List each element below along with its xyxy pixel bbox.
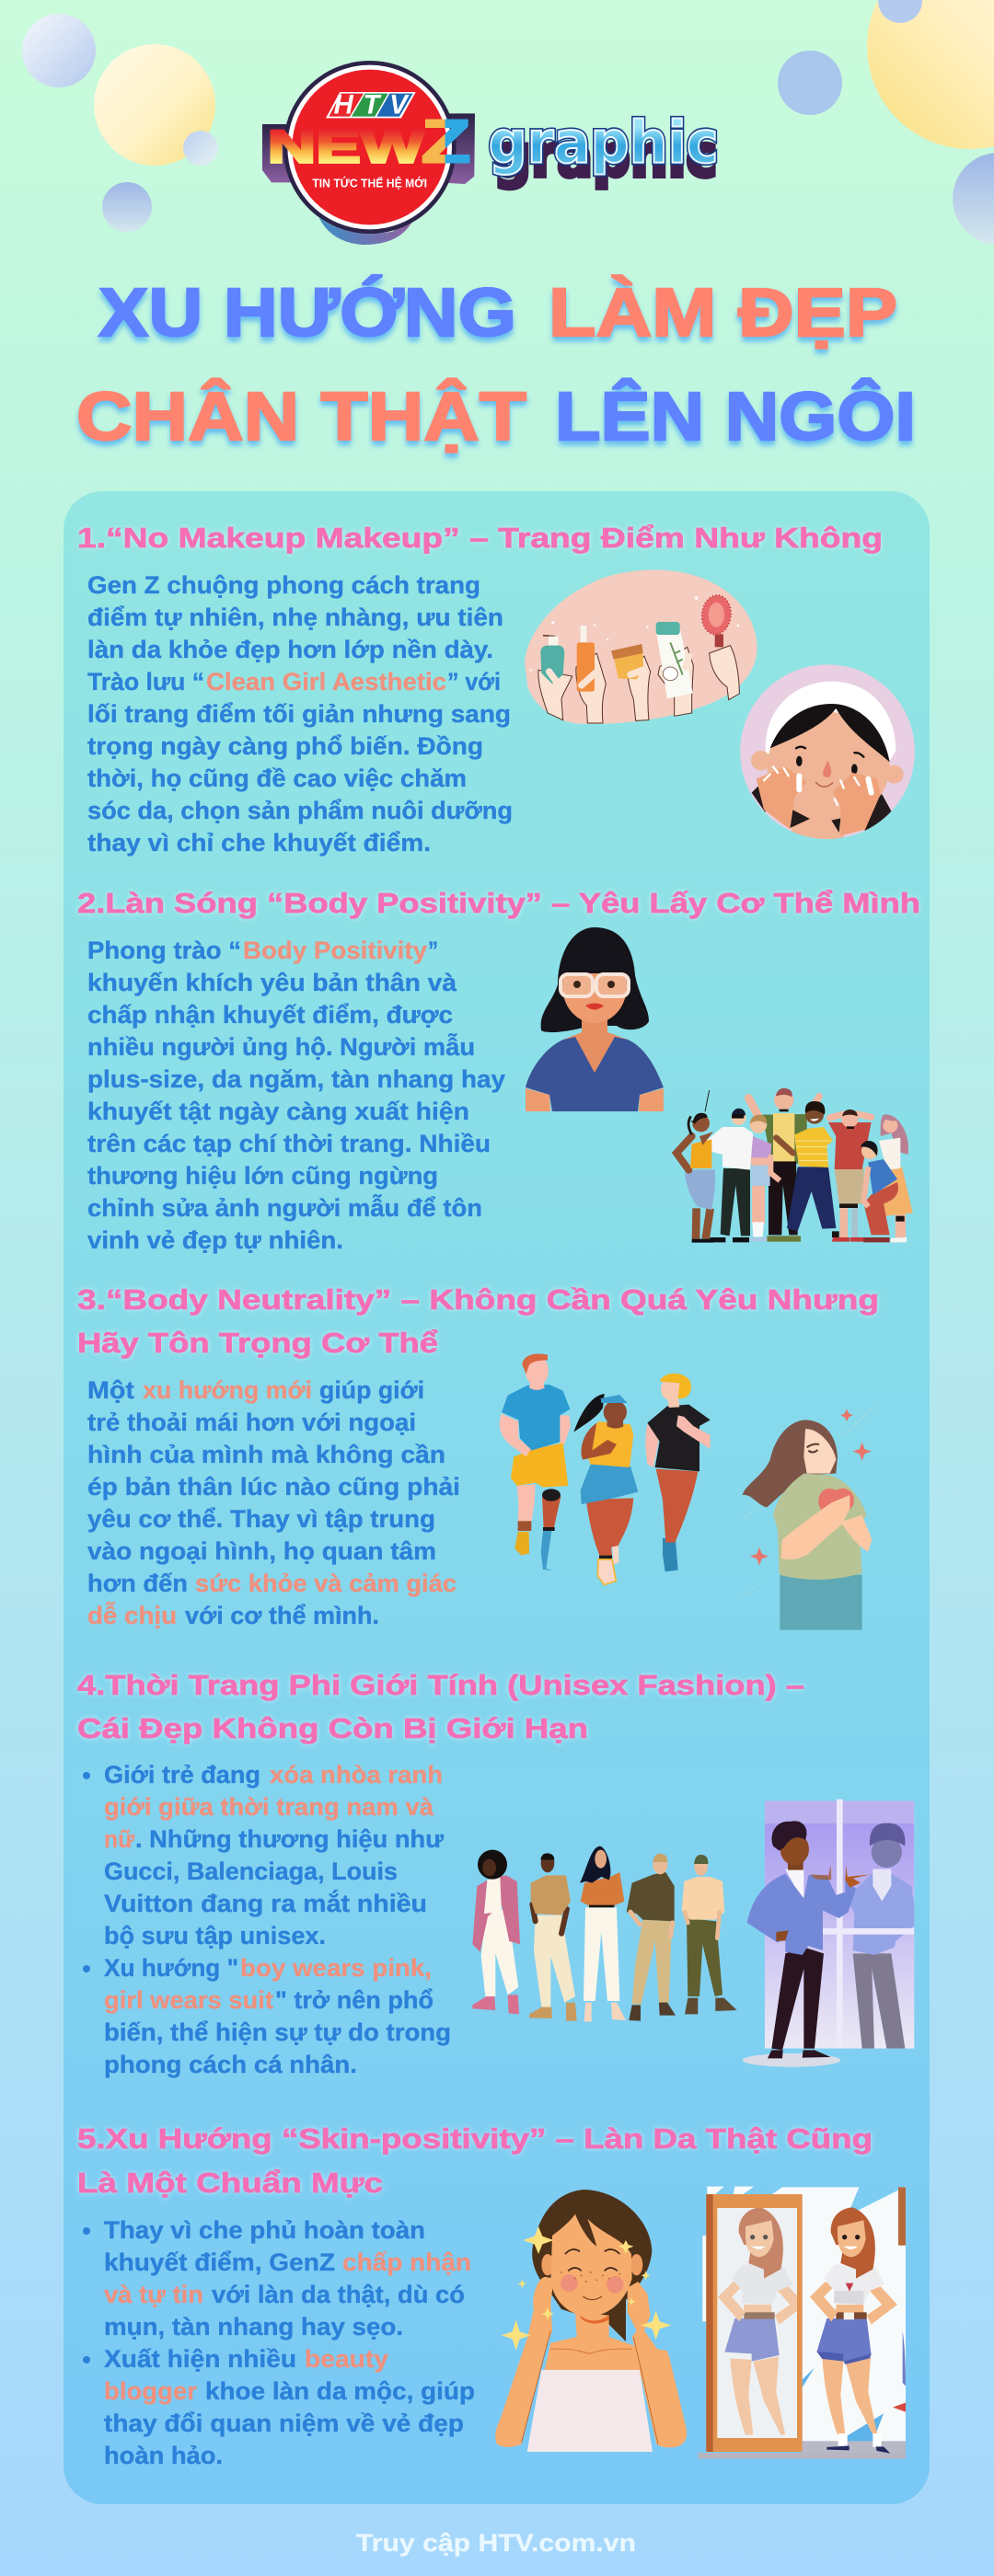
icon: HTV badge: HTV [334,89,410,120]
person: long black hair woman [580,1846,626,2021]
section 2 text: khuyến khích yêu bản thân và [87,969,457,996]
section 4 bullets: . Những thương hiệu như [135,1825,444,1853]
section 5 bullets: và tự tin [104,2281,203,2308]
runner: woman in yellow top [573,1394,638,1585]
reflection [847,1823,918,2049]
section 5 bullets: Xuất hiện nhiều [104,2345,296,2373]
section 1 text [87,571,513,857]
section 5 bullets: Thay vì che phủ hoàn toàn [104,2216,425,2244]
icon: sparkles [750,1409,872,1566]
person: tan sweater [529,1853,577,2021]
person: braided hair woman [676,1090,715,1243]
graphic wordmark: graphic [489,109,719,177]
person: cropped top woman [750,1115,780,1242]
mirror reflection [718,2207,805,2435]
section 2 text: Body Positivity [243,937,427,964]
section 2 text: chấp nhận khuyết điểm, được [87,1001,453,1029]
section 5 heading: Là Một Chuẩn Mực [77,2167,383,2199]
person: white hoodie [702,1109,753,1242]
section 1 text: Clean Girl Aesthetic [206,668,446,696]
panel: content [64,491,930,2504]
section 1 text: ” với [447,668,501,696]
section 3 text: xu hướng mới [143,1376,312,1404]
section 1 text: Gen Z chuộng phong cách trang [87,571,480,599]
section 2 text: plus-size, da ngăm, tàn nhang hay [87,1065,505,1093]
section 4 bullets: girl wears suit [104,1986,273,2014]
section 4 bullets [83,1761,451,2078]
section 4 heading [77,1669,804,1744]
section 3 text: hơn đến [87,1570,188,1597]
logo: HTV NEWZ graphic: NEW [268,121,425,173]
fingers over products [549,656,729,685]
section 2 text: trên các tạp chí thời trang. Nhiều [87,1130,491,1157]
section 5 bullets: khuyết điểm, GenZ [104,2248,335,2276]
section 3 heading [77,1283,879,1359]
section 3 text: hình của mình mà không cần [87,1441,445,1468]
section 5 bullets: khoe làn da mộc, giúp [205,2377,475,2405]
section 3 text: giúp giới [319,1376,424,1404]
section 1 text: thay vì chỉ che khuyết điểm. [87,829,431,857]
section 2 text: vinh vẻ đẹp tự nhiên. [87,1226,343,1254]
person: red shirt arms up [828,1110,872,1242]
logo: HTV NEWZ graphic: Z [421,109,471,177]
mirror [706,2194,805,2452]
section 2 text: ” [428,937,438,964]
section 2 text [87,937,505,1254]
section 4 bullets: nữ [104,1825,134,1853]
illustration: hands holding skincare products [525,569,757,724]
person: pink blazer [472,1850,520,2014]
illustration: smiling girl with freckles [495,2190,687,2452]
section 3 text: dễ chịu [87,1601,177,1629]
decorative bubbles [22,0,994,245]
section 5 heading: 5.Xu Hướng “Skin-positivity” – Làn Da Thật Cũng [77,2122,873,2155]
man [771,1948,824,2050]
illustration: woman and her mirror reflection [698,2187,906,2459]
section 4 bullets: Xu hướng " [104,1954,238,1982]
person: olive shirt [627,1854,676,2021]
person: peach sweater [682,1855,737,2014]
illustration: man at mirror [743,1800,918,2067]
section 3 heading: Hãy Tôn Trọng Cơ Thể [77,1327,438,1359]
section 1 text: làn da khỏe đẹp hơn lớp nền dày. [87,636,493,663]
section 3 text: ép bản thân lúc nào cũng phải [87,1473,460,1501]
section 1 text: thời, họ cũng đề cao việc chăm [87,765,467,792]
title: CHÂN THẬT [76,378,526,454]
woman [810,2207,897,2454]
person: striped shirt man [776,1101,839,1237]
section 2 text: nhiều người ủng hộ. Người mẫu [87,1032,475,1061]
illustration: woman with glasses [526,927,664,1111]
section 1 text: sóc da, chọn sản phẩm nuôi dưỡng [87,797,513,824]
section 3 text: với cơ thể mình. [185,1602,379,1629]
section 4 bullets: bộ sưu tập unisex. [104,1922,326,1949]
person: crouching woman [861,1141,898,1242]
person: tall man in yellow tee [748,1088,819,1242]
section 4 bullets: boy wears pink, [240,1954,432,1982]
title: LÊN NGÔI [555,378,916,454]
illustration: diverse group of people [676,1088,913,1243]
section 4 bullets: Vuitton đang ra mắt nhiều [104,1889,427,1917]
section 2 text: khuyết tật ngày càng xuất hiện [87,1098,469,1125]
section 3 text: sức khỏe và cảm giác [195,1570,457,1597]
section 4 bullets: " trở nên phổ [275,1986,433,2014]
illustration: woman hugging a heart [743,1403,879,1630]
runner: man with prosthetic leg [500,1354,571,1570]
section 5 heading [77,2122,873,2199]
logo: HTV NEWZ graphic [262,61,719,245]
section 2 heading: 2.Làn Sóng “Body Positivity” – Yêu Lấy Cơ Thể Mình [77,887,920,919]
section 4 bullets: phong cách cá nhân. [104,2051,357,2078]
section 4 bullets: Gucci, Balenciaga, Louis [104,1857,398,1885]
illustration: five people unisex fashion [472,1846,737,2021]
section 2 text: Phong trào “ [87,937,241,964]
section 1 text: trọng ngày càng phổ biến. Đồng [87,732,483,760]
section 2 text: thương hiệu lớn cũng ngừng [87,1162,438,1190]
graphic wordmark: graphic [489,109,719,177]
section 3 text: trẻ thoải mái hơn với ngoại [87,1409,416,1436]
section 4 bullets: biến, thể hiện sự tự do trong [104,2018,451,2046]
section 5 bullets: beauty [305,2345,388,2373]
section 4 bullets: xóa nhòa ranh [270,1761,443,1788]
section 1 text: lối trang điểm tối giản nhưng sang [87,700,511,728]
section 3 text: yêu cơ thể. Thay vì tập trung [87,1505,435,1533]
illustration: three runners [500,1354,711,1585]
graphic wordmark: graphic [493,122,717,190]
section 5 bullets: blogger [104,2377,197,2405]
section 5 bullets: thay đổi quan niệm về vẻ đẹp [104,2409,464,2437]
section 1 text: điểm tự nhiên, nhẹ nhàng, ưu tiên [87,604,503,631]
section 5 bullets [83,2216,475,2469]
section 5 bullets: chấp nhận [342,2248,471,2276]
icon: yellow sparkles [502,2226,671,2351]
runner: blonde woman in black tee [645,1374,711,1571]
section 1 text: Trào lưu “ [87,668,204,696]
section 4 heading: Cái Đẹp Không Còn Bị Giới Hạn [77,1712,588,1744]
section 5 bullets: hoàn hảo. [104,2442,223,2469]
footer text: Truy cập HTV.com.vn [356,2529,636,2557]
illustration: girl washing face [740,664,915,840]
title: LÀM ĐẸP [549,274,897,351]
section 4 bullets: giới giữa thời trang nam và [104,1793,434,1821]
section 2 text: chỉnh sửa ảnh người mẫu để tôn [87,1193,482,1222]
section 3 heading: 3.“Body Neutrality” – Không Cần Quá Yêu Nhưng [77,1283,879,1316]
section 4 heading: 4.Thời Trang Phi Giới Tính (Unisex Fashion) – [77,1669,804,1701]
section 4 bullets: Giới trẻ đang [104,1761,260,1788]
section 3 text: vào ngoại hình, họ quan tâm [87,1537,436,1565]
title: XU HƯỚNG [98,274,516,351]
title [76,274,916,454]
section 1 heading: 1.“No Makeup Makeup” – Trang Điểm Như Không [77,522,883,554]
section 5 bullets: mụn, tàn nhang hay sẹo. [104,2313,403,2340]
section 3 text: Một [87,1376,134,1404]
person: woman with skirt behind [879,1114,913,1242]
section 3 text [87,1376,460,1629]
logo: HTV NEWZ graphic: TIN TỨC THẾ HỆ MỚI [312,176,427,190]
section 5 bullets: với làn da thật, dù có [212,2281,465,2308]
